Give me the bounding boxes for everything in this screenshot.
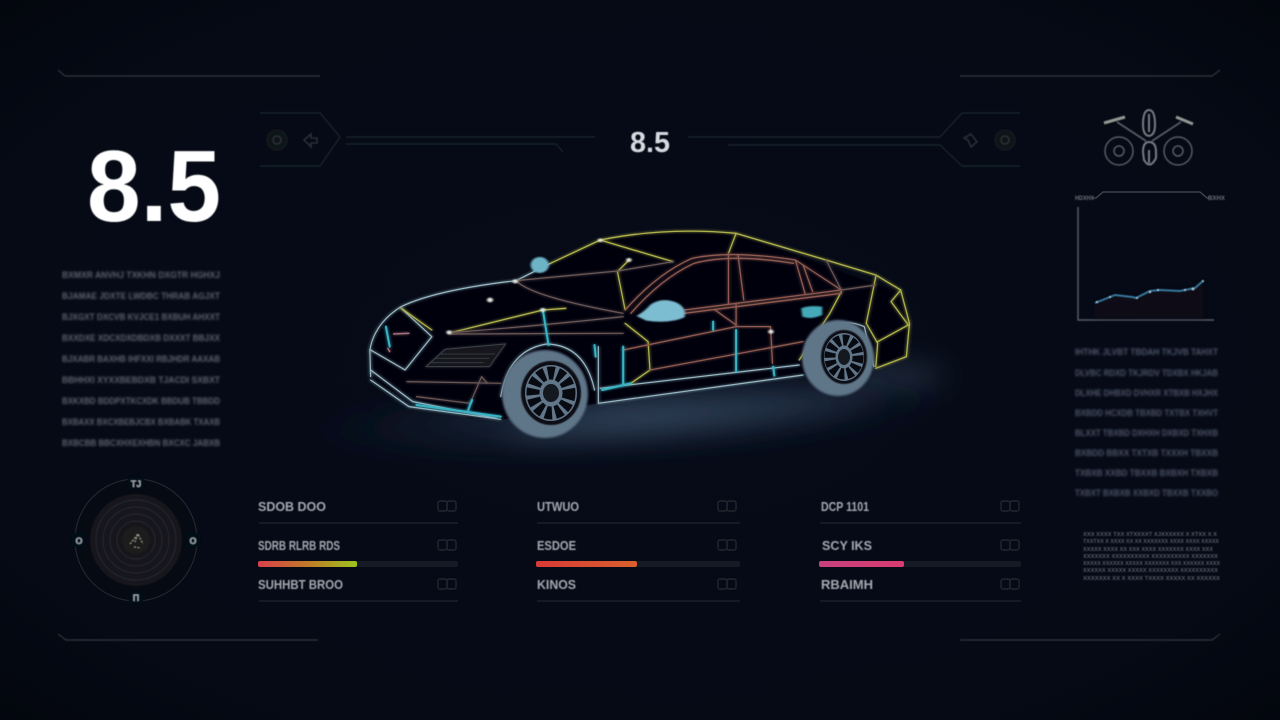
radar labels: O	[75, 536, 83, 546]
radar dial	[72, 477, 200, 603]
status list column 1	[258, 499, 458, 601]
right small paragraph: XXXXXX XXXXX XXXXX XXXXXXXX XXXXXXXXXX	[1083, 568, 1218, 574]
radar labels	[72, 477, 200, 603]
corner frame lines	[58, 70, 1220, 640]
status list column 2: ESDOE	[537, 538, 576, 553]
right text block: IHTHK JLVBT TBDAH TKJVB TAHXT	[1075, 347, 1218, 358]
status list column 3: DCP 1101	[821, 499, 869, 514]
status list column 2: UTWUO	[537, 499, 579, 514]
front wheel	[502, 350, 588, 438]
radar labels: TJ	[131, 479, 141, 489]
left text block: BXMXR ANVHJ TXKHN DXGTR HGHXJ	[62, 270, 220, 281]
right small paragraph: TXXTXX X XXXX XX XX XXXXXXX XXXX XXXX XXXXX	[1083, 539, 1219, 545]
right small paragraph	[1083, 532, 1220, 582]
right text block: TXBXT BXBXB XXBXD TBXXB TXXBO	[1075, 488, 1218, 499]
icon: top right drone glyph	[1104, 110, 1193, 165]
left text block: BBHHXI XYXXBEBDXB TJACDI SXBXT	[62, 375, 220, 386]
left text block: BXKXBD BDDPXTKCXDK BBDUB TBBDD	[62, 396, 220, 407]
header value: 8.5	[630, 127, 670, 159]
body lines: copper	[623, 253, 841, 370]
radar centre marker	[130, 534, 143, 548]
right text block	[1075, 347, 1219, 499]
floor glow	[288, 357, 972, 473]
right small paragraph: XXX XXXX TXX XTXXXXT XJXXXXXX X XTXX X X	[1083, 532, 1217, 538]
body lines: pale teal	[370, 263, 874, 419]
grille and headlamp	[388, 333, 505, 367]
radar labels: O	[189, 536, 197, 546]
right text block: DLXHE DHBXD DVHXR XTBXB HXJHX	[1075, 388, 1219, 399]
chart trend line	[1095, 281, 1203, 303]
status list column 1: SDOB DOO	[258, 499, 326, 514]
body lines: yellow	[401, 231, 909, 383]
radar labels: Π	[133, 593, 139, 603]
status list column 1: SDRB RLRB RDS	[258, 538, 340, 553]
right text block: BXBDD HCXDB TBXBD TXTBX TXHVT	[1075, 408, 1218, 419]
status list column 2	[536, 499, 740, 601]
progress bar 2	[536, 561, 637, 567]
right text block: DLVBC RDXD TKJRDV TDXBX HKJAB	[1075, 368, 1218, 379]
progress bar 3	[819, 561, 904, 567]
right small paragraph: XXXXX XXXXXX XXXXX XXXXXXX XXX XXXXXX XXXX	[1083, 561, 1220, 567]
body lines: teal	[386, 310, 774, 417]
right text block: BLXXT TBXBD DXHXH DXBXD TXHXB	[1075, 428, 1218, 439]
right text block: TXBXB XXBD TBXXB BXBXH TXBXB	[1075, 468, 1218, 479]
car body silhouette	[372, 231, 910, 420]
car wireframe	[288, 231, 972, 473]
rear wheel	[802, 320, 874, 396]
left text block	[62, 270, 221, 449]
line chart	[1075, 192, 1225, 320]
status list column 1: SUHHBT BROO	[258, 577, 343, 592]
right text block: BXBDD BBXX TXTXB TXXXH TBXXB	[1075, 448, 1218, 459]
top header bar	[260, 113, 1020, 166]
progress bar 1	[258, 561, 357, 567]
big score: 8.5	[87, 131, 221, 243]
right small paragraph: XXXXX XXXX XX XXX XXXX XXXXXXX XXXX XXX	[1083, 547, 1213, 553]
connection nodes	[446, 239, 774, 334]
header icons	[267, 130, 1015, 150]
left text block: BXBAXX BXCXBEBJCBX BXBABK TXAXB	[62, 417, 220, 428]
left text block: BJAMAE JDXTE LWDBC THRAB AGJXT	[62, 291, 220, 302]
status list column 3	[819, 499, 1021, 601]
left text block: BXBCBB BBCXHXEXHBN BXCXC JABXB	[62, 438, 220, 449]
right small paragraph: XXXXXXX XX X XXXX TXXXX XXXXX XX XXXXXX	[1083, 576, 1220, 582]
right small paragraph: XXXXXXX XXXXXXXXXX XXXXXXXXXX XXXXXXX	[1083, 554, 1218, 560]
status list column 3: RBAIMH	[821, 577, 873, 592]
glowing sensor blobs	[528, 254, 822, 322]
line chart: BXHX	[1208, 196, 1225, 202]
body lines: dim brown	[407, 260, 876, 403]
left text block: BJXGXT DXCVB KVJCE1 BXBUH AHXXT	[62, 312, 220, 323]
left text block: BJXABR BAXHB IHFXXI RBJHDR AAXAB	[62, 354, 220, 365]
status list column 3: SCY IKS	[822, 538, 872, 553]
status list column 2: KINOS	[537, 577, 576, 592]
chart header labels: HDXHX	[1075, 196, 1094, 202]
left text block: BXXDXE XDCXDXDBDXB DXXXT BBJXX	[62, 333, 221, 344]
